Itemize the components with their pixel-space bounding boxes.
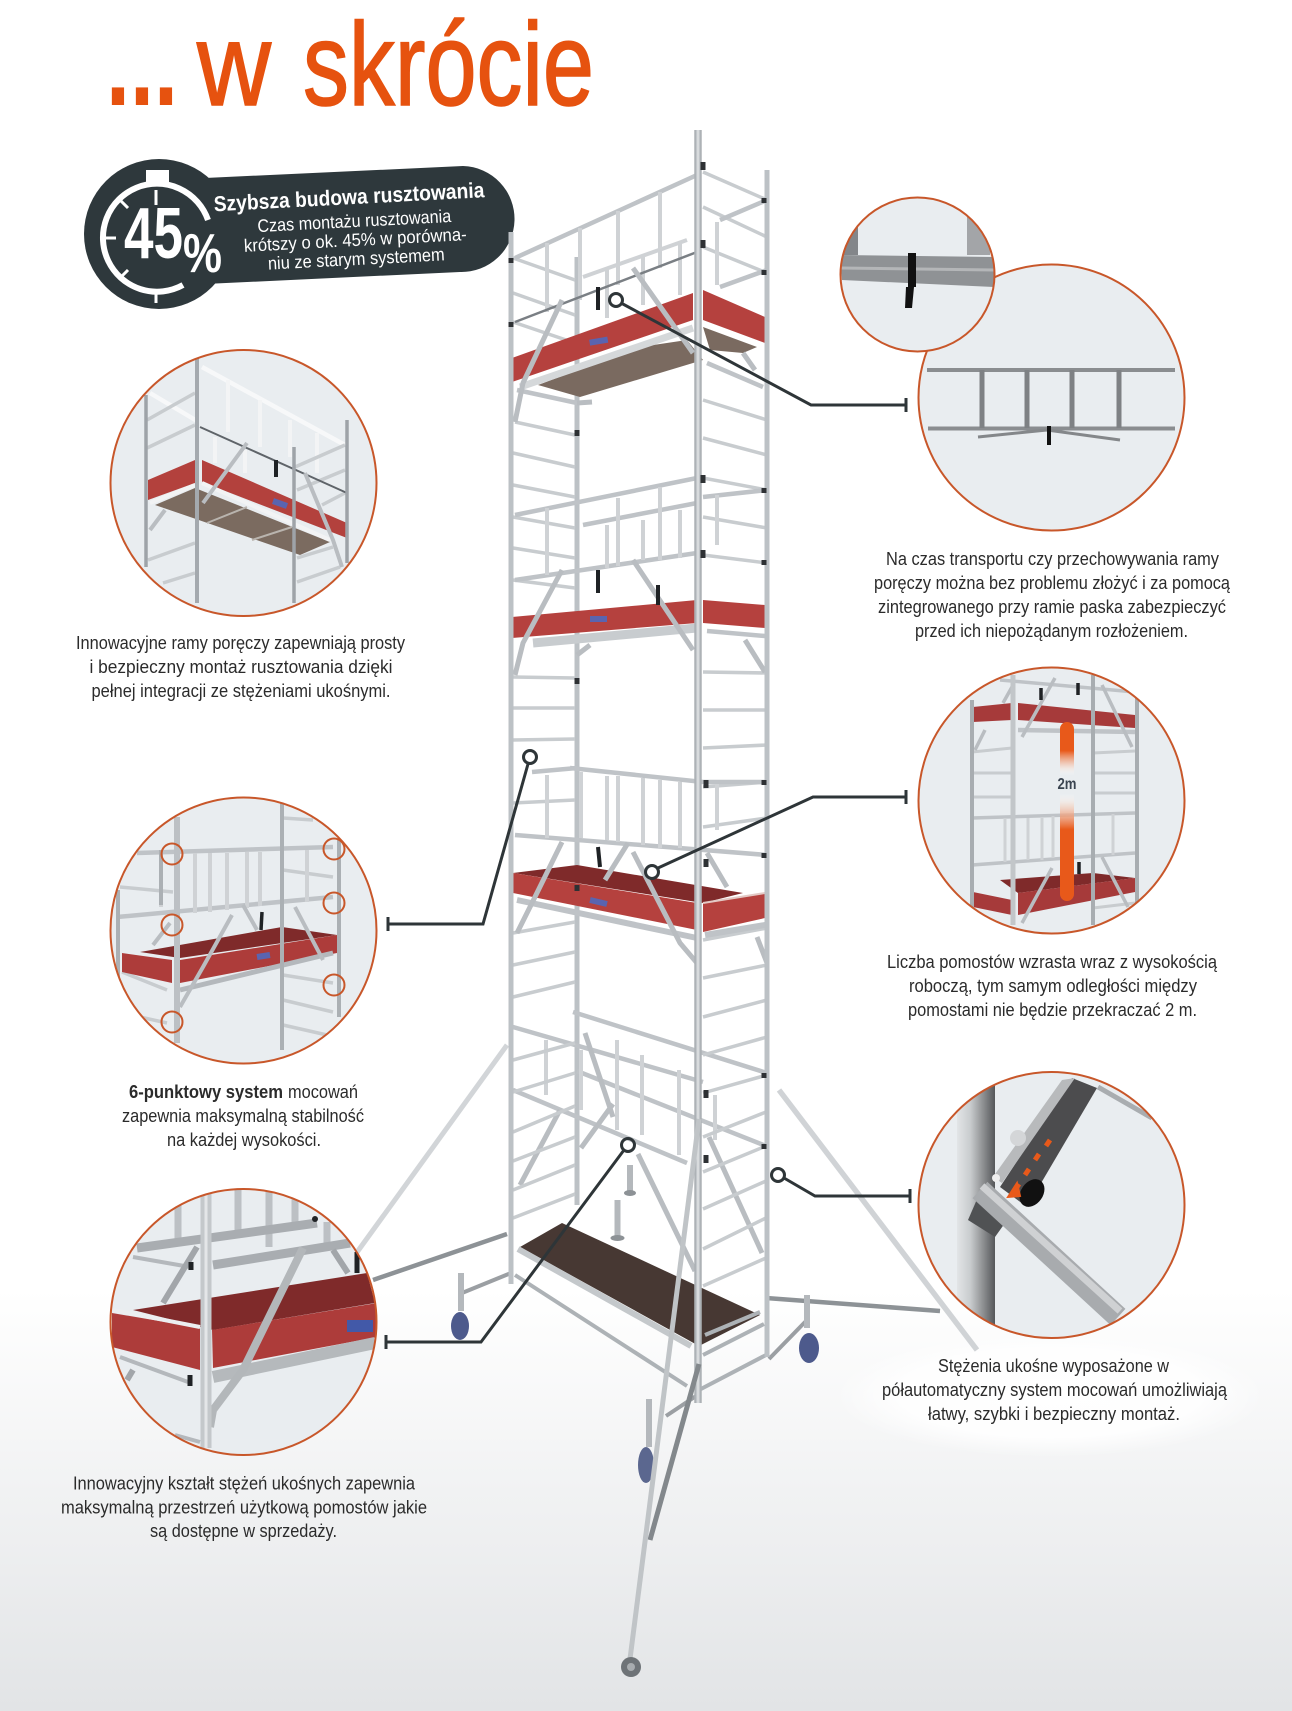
text: semi-automatic connectors: Stężenia ukośne wyposażone w [938,1356,1170,1376]
outriggers [355,1045,977,1350]
panel: strap close-up [838,198,994,352]
text: handrail frames: i bezpieczny montaż rusztowania dzięki [90,657,392,677]
text: foldable frames [874,549,1231,641]
text: handrail frames: pełnej integracji ze stężeniami ukośnymi. [92,681,390,701]
title: ... [106,0,178,131]
badge text: Czas montażu rusztowania [257,206,453,236]
soft glow behind lower right text [835,1333,1265,1457]
panel: 2 m platform spacing detail [918,668,1184,934]
panel: diagonal brace shape detail [110,1189,377,1455]
back left post [574,257,580,1205]
text: foldable frames: zintegrowanego przy ramie paska zabezpieczyć [878,597,1226,617]
badge text [213,178,489,276]
text: 6-point system: mocowań [288,1082,358,1102]
text: semi-automatic connectors: łatwy, szybki i bezpieczny montaż. [928,1404,1180,1424]
level 1 platform [512,175,767,422]
panel: handrail frame detail [110,350,376,616]
text: foldable frames: Na czas transportu czy przechowywania ramy [886,549,1219,569]
callout: 6-point system leader [388,750,536,931]
title [106,0,594,131]
scaffold tower [355,130,977,1677]
badge percent value: % [183,222,222,284]
post joints [511,162,764,1163]
base platform [515,1223,766,1390]
text: diagonal brace shape: są dostępne w sprzedaży. [150,1521,337,1541]
left rungs [513,258,575,1218]
badge text: krótszy o ok. 45% w porówna- [243,224,467,256]
badge percent value: 45 [124,194,183,274]
text: handrail frames: Innowacyjne ramy poręczy zapewniają prosty [76,633,405,653]
text: diagonal brace shape: maksymalną przestrzeń użytkową pomostów jakie [61,1498,427,1518]
level 3 platform [513,768,767,963]
text: platform count: roboczą, tym samym odległości między [909,976,1197,996]
tower posts [511,130,767,1403]
right rungs [703,172,767,1286]
callout: foldable frames leader [610,294,906,412]
panel: 6-point connection detail [110,798,376,1064]
badge shape [84,159,515,309]
text: handrail frames [76,633,405,701]
text: semi-automatic connectors: półautomatyczny system mocowań umożliwiają [882,1380,1228,1400]
callout: platform count leader [646,790,906,878]
text: foldable frames: przed ich niepożądanym rozłożeniem. [915,621,1188,641]
title: skrócie [303,0,594,131]
text: diagonal brace shape: Innowacyjny kształt stężeń ukośnych zapewnia [73,1474,416,1494]
badge text: niu ze starym systemem [267,244,445,274]
callout: diagonal shape leader [386,1138,634,1349]
badge: 45% faster build [84,159,515,309]
text: 6-point system: na każdej wysokości. [167,1130,321,1150]
six orange markers [162,838,344,1032]
badge text: Szybsza budowa rusztowania [213,178,486,216]
front diagonal outrigger [621,1119,699,1677]
text: platform count: Liczba pomostów wzrasta wraz z wysokością [887,952,1218,972]
casters [451,1165,819,1483]
panel: semi-automatic connector detail [918,1072,1184,1338]
lower handrail frame [513,1012,767,1271]
text: 6-point system: zapewnia maksymalną stabilność [122,1106,364,1126]
text: 6-point system [122,1082,364,1150]
text: 6-point system: 6-punktowy system [129,1082,283,1102]
icon: stopwatch [102,170,208,303]
text: diagonal brace shape [61,1474,427,1541]
panel: folded frame detail [918,264,1184,530]
text: platform count: pomostami nie będzie przekraczać 2 m. [908,1000,1197,1020]
text: foldable frames: poręczy można bez problemu złożyć i za pomocą [874,573,1231,593]
callout: semi-automatic leader [772,1168,910,1203]
label: 2m: 2m [1058,776,1076,793]
text: semi-automatic connectors [882,1356,1228,1424]
title: w [196,0,272,131]
level 2 platform [512,478,767,675]
icon: orange arrow [1008,1140,1050,1197]
text: platform count [887,952,1218,1020]
